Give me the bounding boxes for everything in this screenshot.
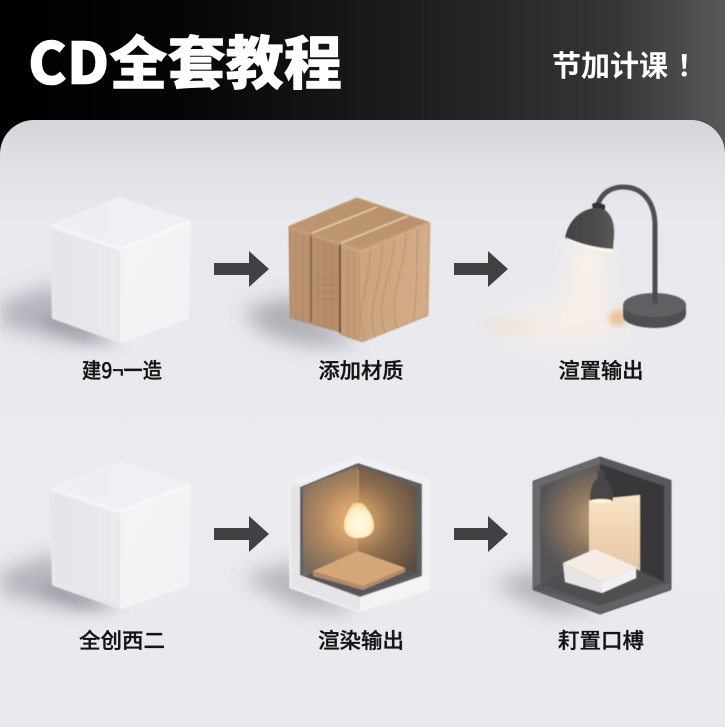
- arrow 1: [214, 251, 269, 287]
- step 4 label: 全创西二: [79, 625, 165, 655]
- step 5 label: 渲染输出: [318, 625, 404, 655]
- step 1 label: 建9¬一造: [82, 355, 162, 385]
- arrow 2: [454, 251, 508, 287]
- step 2 label: 添加材质: [318, 355, 404, 385]
- step 6 label: 耓置口榑: [558, 625, 644, 655]
- step 3 label: 渲置输出: [558, 355, 644, 385]
- title: CD全套教程: [28, 17, 342, 101]
- step 5: lit white room: [242, 457, 429, 612]
- arrow 4: [454, 516, 508, 552]
- step 2: wood cube: [242, 199, 429, 345]
- step 6: dark room: [492, 457, 670, 613]
- step 3: desk lamp: [480, 187, 686, 347]
- step 4: white cube: [0, 463, 189, 610]
- arrow 3: [214, 516, 269, 552]
- header tagline: 节加计课 ！: [552, 43, 706, 85]
- step 1: white cube: [0, 199, 189, 344]
